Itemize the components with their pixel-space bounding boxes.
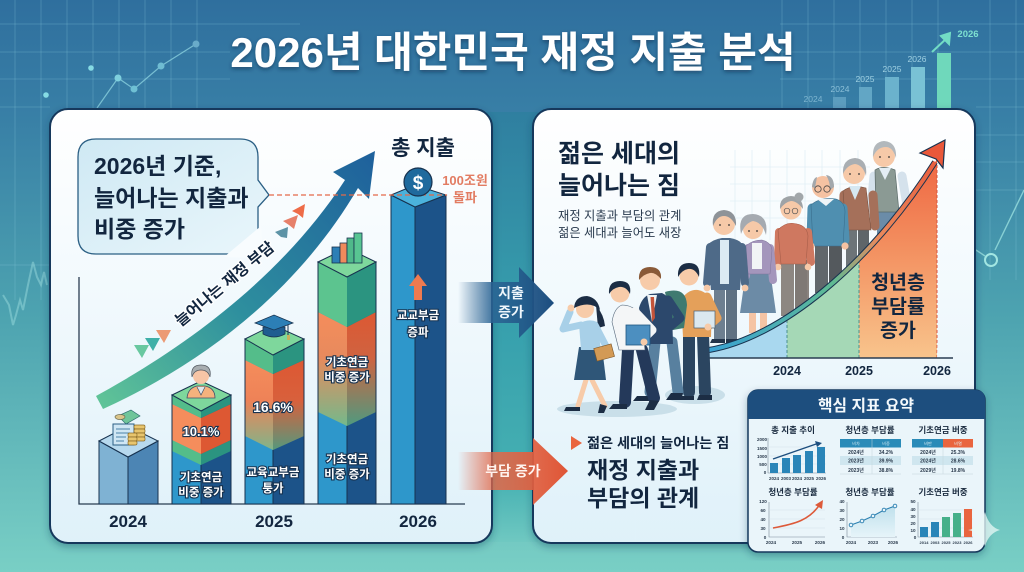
mini chart: total trend: 2025 xyxy=(804,476,815,481)
bar labels: 교교부금 xyxy=(397,309,440,322)
bar labels: 비중 증가 xyxy=(324,467,370,481)
youth 1 xyxy=(563,296,615,413)
elder 5 xyxy=(843,158,875,270)
mini chart: pension bars: 40 xyxy=(910,507,916,512)
year labels: 2026 xyxy=(399,512,437,531)
youth 2 xyxy=(609,281,659,410)
dashed 100조 line xyxy=(269,194,447,196)
label: 100조원 돌파: 100조원 xyxy=(442,173,488,188)
decoration: right side node line xyxy=(976,190,1024,266)
label: 100조원 돌파: 돌파 xyxy=(453,190,477,205)
elder 2 xyxy=(740,214,776,333)
callout: 2026 summary: 2026년 기준, xyxy=(94,153,221,179)
bar labels: 교육교부금 xyxy=(247,466,300,479)
elder 1 xyxy=(704,210,748,343)
mini table: pension share xyxy=(912,425,973,474)
arrow: burden increase: 부담 증가 xyxy=(485,463,541,479)
mini chart: burden line: 10 xyxy=(839,526,845,531)
mini chart: burden curve: 0 xyxy=(764,535,767,540)
mini table: pension share: 19.8% xyxy=(951,468,966,474)
mini chart: burden curve: 청년층 부담률 xyxy=(768,487,818,497)
mini chart: pension bars: 2025 xyxy=(942,540,951,545)
axis years: 2026 xyxy=(923,364,951,378)
label: youth burden: 증가 xyxy=(880,320,916,342)
mini table: pension share: 비열 xyxy=(954,440,962,447)
year labels xyxy=(109,512,437,531)
elder 6 xyxy=(871,141,907,242)
bar labels: 기초연금 xyxy=(326,452,369,466)
mini table: youth burden: 청년층 부담률 xyxy=(845,425,895,435)
decoration: top-right rising bars: 2025 xyxy=(856,74,875,84)
bar labels: 비중 증가 xyxy=(324,370,370,384)
icon: mini bar chart xyxy=(332,233,362,263)
axis years xyxy=(773,364,951,378)
mini chart: burden line: 20 xyxy=(839,517,845,522)
decoration: top-right rising bars: 2025 xyxy=(883,64,902,74)
subtext: 재정 지출과 부담의 관계 xyxy=(558,209,681,223)
bar labels: 비중 증가 xyxy=(178,485,224,499)
bar: 2025 main xyxy=(245,325,304,504)
mini chart: total trend: 500 xyxy=(759,462,767,467)
mini chart: pension bars: 20 xyxy=(910,521,916,526)
title: 2026년 대한민국 재정 지출 분석 xyxy=(230,29,796,76)
mini chart: pension bars: 30 xyxy=(910,514,916,519)
icon: dollar coin xyxy=(404,168,432,196)
bar labels xyxy=(178,309,440,499)
mini table: pension share: 2024년 xyxy=(920,449,936,456)
mini table: pension share: 2024년 xyxy=(920,458,936,464)
subtext xyxy=(558,209,681,240)
decoration: top-right rising bars: 2026 xyxy=(957,29,979,40)
icon: dollar coin: $ xyxy=(413,173,424,194)
axes xyxy=(79,277,465,504)
mini chart: burden curve: 2026 xyxy=(815,540,826,545)
axis years: 2025 xyxy=(845,364,873,378)
mini chart: burden line: 2023 xyxy=(868,540,879,545)
elder 4 xyxy=(807,175,849,293)
bar labels: 10.1% xyxy=(183,424,220,439)
summary header: 핵심 지표 요약 xyxy=(818,397,914,415)
arrow: spending increase: 지출 xyxy=(498,285,524,301)
bottom marker and caption: 젊은 세대의 늘어나는 짐 xyxy=(587,436,729,452)
mini table: pension share: 비만 xyxy=(924,440,932,447)
mini chart: burden curve: 2024 xyxy=(766,540,777,545)
mini chart: pension bars: 0 xyxy=(914,535,917,540)
year labels: 2025 xyxy=(255,512,293,531)
year labels: 2024 xyxy=(109,512,147,531)
mini chart: burden line xyxy=(839,487,899,545)
callout: 2026 summary: 늘어나는 지출과 xyxy=(94,185,249,211)
mini chart: pension bars xyxy=(910,487,973,545)
mini chart: total trend xyxy=(757,425,827,481)
mini chart: burden line: 30 xyxy=(839,508,845,513)
mini table: youth burden xyxy=(840,425,901,474)
bar: 2026 mid xyxy=(318,248,376,504)
arrow: spending increase: 증가 xyxy=(498,304,524,320)
axis years: 2024 xyxy=(773,364,801,378)
mini chart: pension bars: 2023 xyxy=(953,540,962,545)
chevrons lower xyxy=(134,330,171,358)
bar labels: 16.6% xyxy=(253,399,293,415)
summary header xyxy=(748,390,985,419)
youth 3 xyxy=(633,267,687,401)
mini chart: burden curve: 40 xyxy=(760,517,766,522)
heading: total spending: 총 지출 xyxy=(391,137,455,160)
label: 100조원 돌파 xyxy=(442,173,488,205)
mini chart: pension bars: 기초연금 버중 xyxy=(918,487,968,497)
mini chart: burden line: 청년층 부담률 xyxy=(845,487,895,497)
mini chart: total trend: 2003 xyxy=(781,476,792,481)
bar labels: 증파 xyxy=(407,326,429,339)
icon: up arrow xyxy=(409,274,427,300)
panel: left spending chart xyxy=(50,109,492,543)
bottom heading: 부담의 관계 xyxy=(587,485,699,511)
mini table: youth burden: 2023년 xyxy=(848,467,864,474)
youth 4 xyxy=(676,263,717,400)
mini chart: total trend: 2024 xyxy=(792,476,803,481)
mini chart: total trend: 1500 xyxy=(757,446,768,451)
bottom heading: 재정 지출과 xyxy=(587,457,699,483)
mini chart: burden line: 40 xyxy=(839,499,845,504)
mini table: youth burden: 2023년 xyxy=(848,458,864,464)
mini chart: total trend: 0 xyxy=(764,470,767,475)
mini chart: pension bars: 50 xyxy=(910,499,916,504)
decoration: top-right rising bars: 2024 xyxy=(831,84,850,94)
arrow label: 늘어나는 재정 부담 xyxy=(172,238,278,330)
mini chart: burden line: 2026 xyxy=(888,540,899,545)
axis xyxy=(709,357,953,359)
arrow: spending increase xyxy=(458,267,554,338)
bar: 2024 xyxy=(99,426,158,504)
panel: young generation burden xyxy=(533,109,975,543)
label: youth burden xyxy=(871,272,925,342)
mini table: pension share: 25.3% xyxy=(951,450,966,456)
mini chart: pension bars: 2014 xyxy=(920,540,929,545)
big rising arrow xyxy=(96,151,375,409)
decoration: top-right rising bars xyxy=(804,29,979,110)
mini table: pension share: 2029년 xyxy=(920,467,936,474)
decoration: top-left line chart xyxy=(43,40,200,108)
mini chart: pension bars: 2026 xyxy=(964,540,973,545)
icon: graduation cap xyxy=(255,315,293,340)
mini table: youth burden: 38.8% xyxy=(879,468,894,474)
mini chart: burden line: 0 xyxy=(842,535,845,540)
panel: key indicators summary xyxy=(748,390,985,552)
decoration: top-right rising bars: 2026 xyxy=(908,54,927,64)
bar: 2026 total xyxy=(391,185,446,504)
arrow: burden increase xyxy=(458,438,568,505)
mini table: youth burden: 39.9% xyxy=(879,458,894,464)
bar labels: 기초연금 xyxy=(180,470,223,484)
heading: 늘어나는 짐 xyxy=(558,172,680,200)
icon: elderly person xyxy=(187,365,215,398)
mini chart: burden curve xyxy=(759,487,826,545)
mini chart: pension bars: 10 xyxy=(910,528,916,533)
label: youth burden: 부담률 xyxy=(871,296,925,318)
label: youth burden: 청년층 xyxy=(871,272,925,294)
decoration: top-right rising bars: 2024 xyxy=(804,94,823,104)
elder 3 xyxy=(775,192,811,316)
mini chart: burden curve: 60 xyxy=(760,508,766,513)
mini chart: total trend: 2026 xyxy=(816,476,827,481)
mini table: youth burden: 34.2% xyxy=(879,450,894,456)
bar labels: 퉁가 xyxy=(262,481,284,495)
mini table: youth burden: 2024년 xyxy=(848,449,864,456)
faint grid xyxy=(730,150,870,240)
mini chart: total trend: 2000 xyxy=(757,437,768,442)
bar labels: 기초연금 xyxy=(326,355,369,369)
mini chart: total trend: 2024 xyxy=(769,476,780,481)
rising curve arrow xyxy=(709,140,945,350)
mini table: pension share: 기초연금 버중 xyxy=(918,425,968,435)
chevrons upper xyxy=(275,204,305,238)
bottom heading xyxy=(587,457,699,511)
mini chart: total trend: 1000 xyxy=(757,454,768,459)
mini table: pension share: 28.6% xyxy=(951,458,966,464)
subtext: 젊은 세대과 늘어도 새장 xyxy=(558,226,681,240)
mini chart: burden curve: 30 xyxy=(760,526,766,531)
decoration: left candlestick line xyxy=(3,262,47,325)
mini chart: total trend: 총 지출 추이 xyxy=(771,425,815,435)
icon: document and coins xyxy=(113,410,145,445)
heading xyxy=(558,140,680,200)
heading: 젊은 세대의 xyxy=(558,140,680,168)
mini chart: burden line: 2024 xyxy=(846,540,857,545)
mini chart: pension bars: 2003 xyxy=(931,540,940,545)
callout: 2026 summary xyxy=(78,139,269,258)
callout: 2026 summary: 비중 증가 xyxy=(94,216,185,242)
burden area xyxy=(709,140,937,358)
mini table: youth burden: 비중 xyxy=(882,440,890,447)
mini table: youth burden: 비차 xyxy=(852,440,860,447)
mini chart: burden curve: 2025 xyxy=(792,540,803,545)
decoration: sparkle xyxy=(968,512,1000,546)
ground shadow xyxy=(557,386,725,417)
mini chart: burden curve: 120 xyxy=(759,499,767,504)
bar: 2025 first xyxy=(172,381,231,504)
